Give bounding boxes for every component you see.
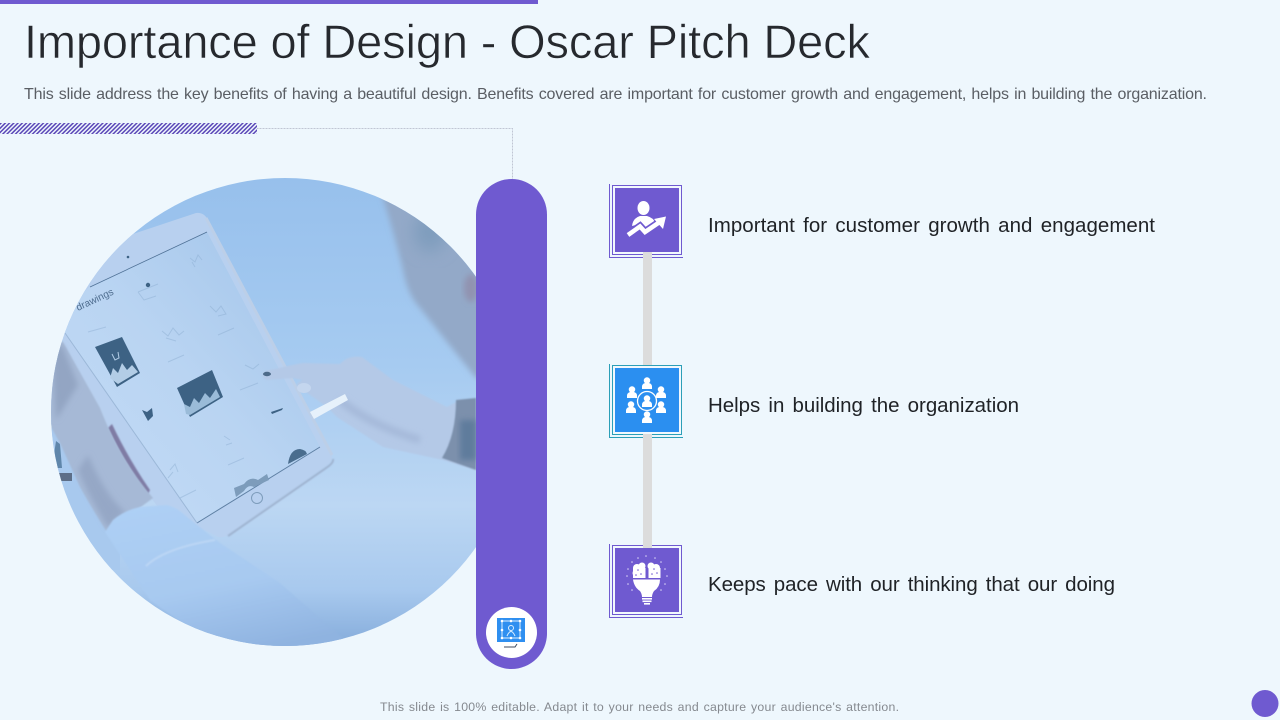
avatar on screen: [288, 449, 307, 464]
photo: hands using a tablet: [51, 178, 476, 646]
screen heading: drawings: [75, 287, 116, 314]
pointing hand: [263, 357, 456, 460]
watch strap: [442, 398, 476, 470]
shadow under palm: [108, 424, 150, 494]
left hand and arm: [50, 338, 153, 532]
connector line: [257, 128, 512, 180]
vertical purple pill: [476, 179, 547, 669]
small background objects: [54, 441, 62, 468]
pill icon: design board: [486, 607, 537, 658]
lower-left blue strip: [50, 420, 120, 570]
timeline stem: [643, 252, 652, 548]
title: Importance of Design - Oscar Pitch Deck: [24, 15, 870, 68]
tablet screen: [170, 232, 278, 368]
item text: Keeps pace with our thinking that our doing: [708, 573, 1115, 596]
item 3: [610, 544, 1115, 618]
icon: brain light bulb: [610, 544, 683, 618]
hatched decorative band: [0, 123, 257, 134]
tablet body: [62, 213, 316, 440]
artwork thumbnail 1: [95, 337, 140, 387]
screen edge lines: [90, 232, 207, 287]
icon: organization: [610, 364, 683, 438]
fingernails: [263, 372, 271, 376]
tablet outer bezel shadow: [228, 459, 333, 536]
item text: Important for customer growth and engagement: [708, 214, 1155, 237]
top accent bar: [0, 0, 538, 4]
heart thumbnail: [142, 408, 153, 421]
icon: customer growth: [610, 184, 683, 258]
artwork thumbnail 2: [177, 370, 223, 417]
person's blurred shoulder: [382, 199, 476, 380]
faint sketches: [88, 255, 259, 498]
dark dots and marks: [146, 283, 150, 287]
home button: [252, 492, 262, 504]
sleeve: [106, 506, 343, 646]
corner dot: [1252, 690, 1278, 717]
item 2: [610, 364, 1019, 438]
footer note: This slide is 100% editable. Adapt it to your needs and capture your audience's attention.: [380, 700, 899, 714]
bottom bar on screen: [234, 474, 269, 497]
stylus: [310, 394, 348, 419]
subtitle: This slide address the key benefits of having a beautiful design. Benefits covered are important for customer growth and engagement, helps in building the organization.: [24, 86, 1207, 103]
item 1: [610, 184, 1155, 258]
item text: Helps in building the organization: [708, 394, 1019, 417]
